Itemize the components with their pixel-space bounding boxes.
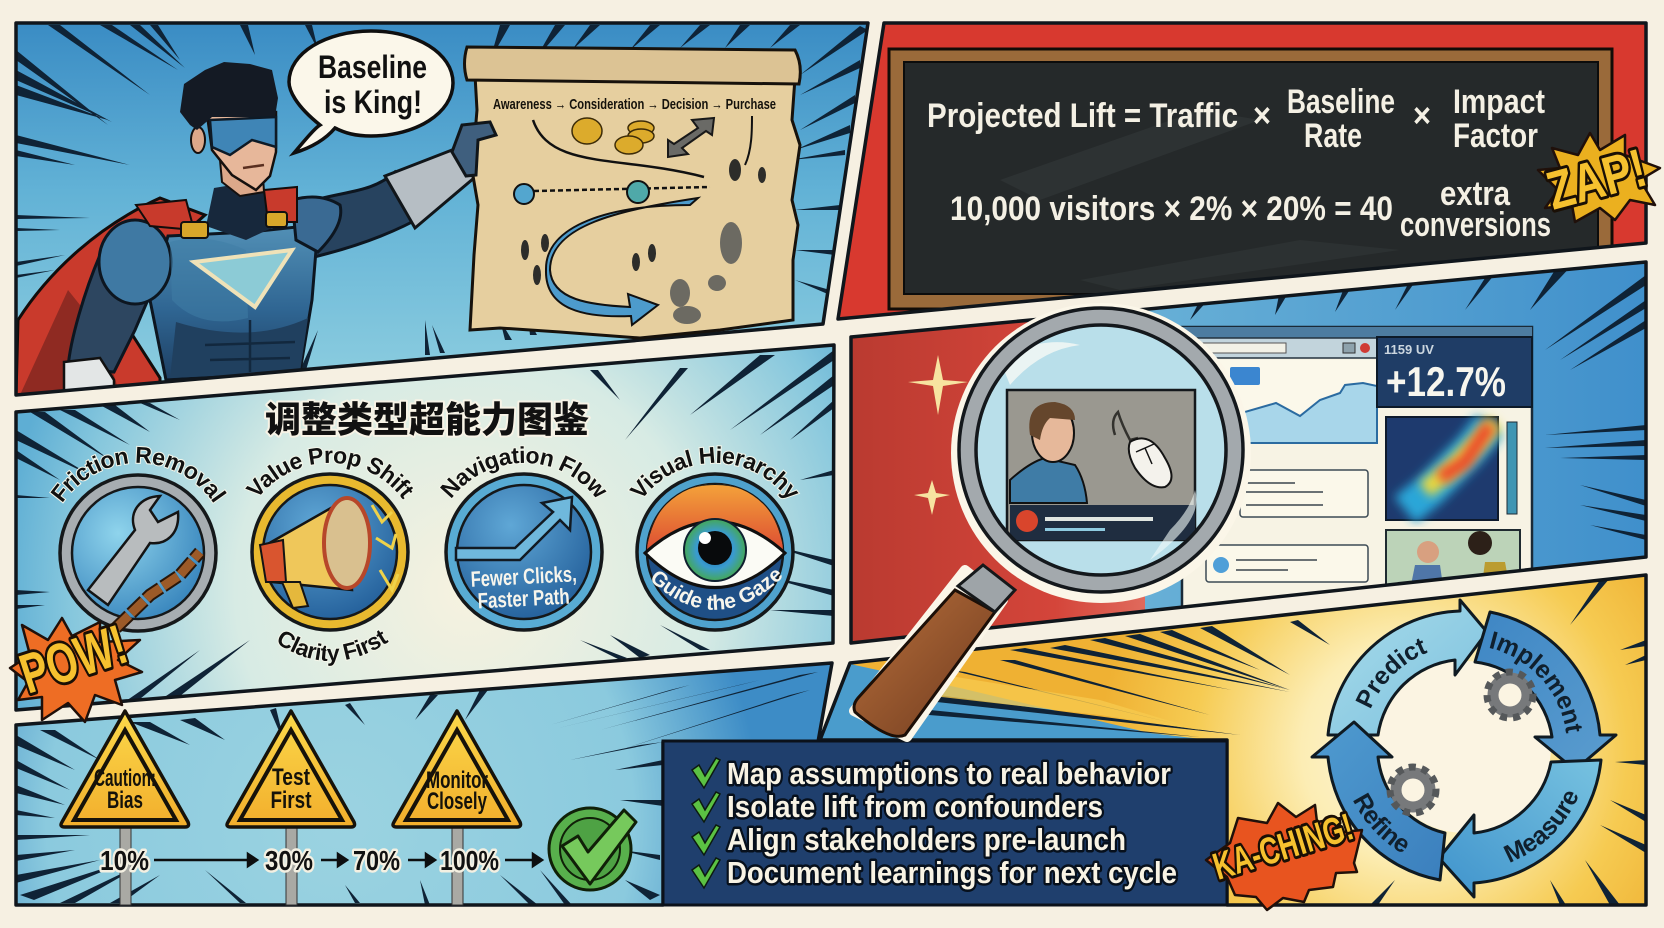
footprints: [521, 159, 766, 324]
lift metric: [1377, 337, 1532, 407]
badge: friction removal: [49, 446, 228, 633]
formula text: [927, 83, 1551, 244]
segment: measure: Measure: [1503, 792, 1578, 862]
face: [207, 112, 276, 190]
segment: implement: [1474, 610, 1618, 760]
rollout percentages: 70%: [353, 845, 400, 876]
rollout percentages: 10%: [100, 845, 149, 876]
hair: [180, 62, 278, 130]
wrench: [88, 496, 178, 605]
sign: caution bias: [61, 711, 189, 905]
sign: caution bias: Bias: [107, 787, 143, 814]
rollout percentages: [100, 845, 499, 876]
result card one: [1240, 470, 1368, 517]
mouth: [243, 165, 264, 168]
speech bubble: [289, 31, 453, 153]
torso: [150, 226, 316, 380]
panel: rollout ladder: [10, 660, 840, 910]
panel: superpower catalog: [14, 343, 836, 712]
checklist box: Isolate lift from confounders: [727, 789, 1103, 824]
caption: Guide the Gaze: [652, 570, 782, 610]
chain: [116, 552, 200, 628]
sign: caution bias: Caution:: [94, 765, 156, 792]
segment: predict: Predict: [1356, 638, 1428, 708]
double arrow: [668, 118, 714, 157]
checklist box: [663, 741, 1227, 905]
formula text: 10,000 visitors × 2% × 20% = 40: [950, 190, 1393, 228]
label: Friction Removal: [49, 446, 228, 504]
parchment sheet: [470, 75, 800, 338]
rainbow brow: [645, 484, 785, 553]
ear: [191, 127, 205, 153]
result card two: [1206, 545, 1368, 582]
back arm: [67, 256, 148, 374]
panel: dashboard inspection: [845, 255, 1655, 650]
panel: prediction cycle: [820, 573, 1648, 907]
green check badge: [549, 808, 636, 890]
arrow: [456, 497, 572, 560]
abs shading: [170, 318, 308, 378]
section title: 调整类型超能力图鉴: [265, 391, 589, 443]
rollout percentages: 30%: [265, 845, 313, 876]
person: [1010, 458, 1087, 503]
badge: value prop shift: [244, 447, 414, 667]
formula text: Rate: [1304, 117, 1362, 155]
label: Visual Hierarchy: [628, 445, 800, 500]
scroll journey map: [464, 47, 800, 338]
heatmap: [1386, 417, 1517, 520]
sign: test first: First: [270, 787, 312, 814]
dashed path: [514, 181, 710, 204]
checklist box: Document learnings for next cycle: [727, 855, 1177, 890]
eye: [645, 522, 785, 588]
rollout percentages: 100%: [440, 845, 499, 876]
funnel text: Awareness → Consideration → Decision → Purchase: [493, 96, 776, 113]
outstretched arm: [316, 170, 411, 258]
gauntlet: [385, 150, 474, 228]
gear lower: [1390, 767, 1436, 813]
megaphone: [266, 500, 352, 590]
segment: measure: [1443, 758, 1602, 898]
trend chart: [1203, 360, 1377, 443]
formula text: extra: [1440, 175, 1511, 213]
sign: monitor closely: Monitor: [426, 767, 488, 794]
formula text: Baseline: [1287, 83, 1395, 121]
suit collar: [207, 186, 272, 240]
check marks: [692, 758, 720, 888]
mask: [210, 117, 276, 155]
curved path: [533, 120, 704, 177]
handle: [854, 565, 1015, 737]
caption: Fewer Clicks,: [470, 561, 577, 592]
sign: test first: Test: [272, 764, 310, 791]
dashboard window: 1159 UV: [1384, 342, 1434, 357]
magnifying glass: [854, 303, 1251, 737]
speech bubble: is King!: [324, 84, 422, 120]
label: Value Prop Shift: [244, 447, 414, 500]
sign: test first: [227, 711, 355, 905]
dashboard window: +12.7%: [1386, 358, 1506, 405]
mouse: [1113, 412, 1172, 487]
customer photo: [1385, 529, 1521, 584]
gold clasps: [181, 222, 208, 238]
formula text: ×: [1253, 97, 1271, 135]
burst: KA-CHING: [1206, 803, 1362, 910]
formula text: Projected Lift = Traffic: [927, 97, 1238, 135]
badge: visual hierarchy: [628, 445, 800, 632]
neck: [220, 160, 264, 196]
panel: hero with journey map: [16, 23, 876, 398]
rollout arrows: [154, 854, 542, 866]
left shoulder: [99, 220, 171, 304]
red cape: [16, 198, 205, 396]
burst: KA-CHING: KA-CHING!: [1208, 806, 1358, 889]
badge: value prop shift: Clarity First: [278, 630, 390, 667]
formula text: Factor: [1453, 117, 1538, 155]
lens content: [970, 320, 1230, 580]
checklist box: Align stakeholders pre-launch: [727, 822, 1126, 857]
cycle diagram: [1310, 598, 1618, 898]
coins: [572, 118, 654, 154]
lightning: [372, 505, 398, 590]
panel: projection formula: [830, 20, 1650, 320]
sign: monitor closely: [393, 711, 521, 905]
segment: refine: Refine: [1353, 792, 1408, 852]
burst: POW: POW!: [12, 612, 134, 705]
red collar: [136, 200, 194, 230]
pectorals: [170, 238, 248, 321]
right deltoid: [292, 197, 341, 252]
segment: refine: [1310, 720, 1446, 882]
hero glove gripping the scroll: [452, 122, 496, 176]
hero character: [16, 62, 474, 396]
sign: monitor closely: Closely: [427, 788, 487, 815]
segment: predict: [1326, 598, 1484, 736]
sparkles: [908, 355, 968, 415]
chest emblem: [194, 250, 292, 307]
gear upper: [1487, 672, 1533, 718]
formula text: ×: [1413, 97, 1431, 135]
scroll roll: [464, 47, 800, 84]
formula text: Impact: [1453, 83, 1545, 121]
white glove: [64, 358, 114, 392]
checklist box: Map assumptions to real behavior: [727, 756, 1171, 791]
chalkboard: [889, 49, 1612, 309]
segment: implement: Implement: [1490, 631, 1582, 734]
dashboard window: [1182, 327, 1532, 620]
burst: POW: [10, 612, 142, 722]
badge: navigation flow: Faster Path: [477, 584, 570, 613]
label: Navigation Flow: [439, 445, 608, 499]
badge: navigation flow: [439, 445, 608, 632]
speech bubble: Baseline: [318, 49, 427, 85]
blue arrow: [546, 198, 698, 325]
formula text: conversions: [1400, 206, 1551, 244]
